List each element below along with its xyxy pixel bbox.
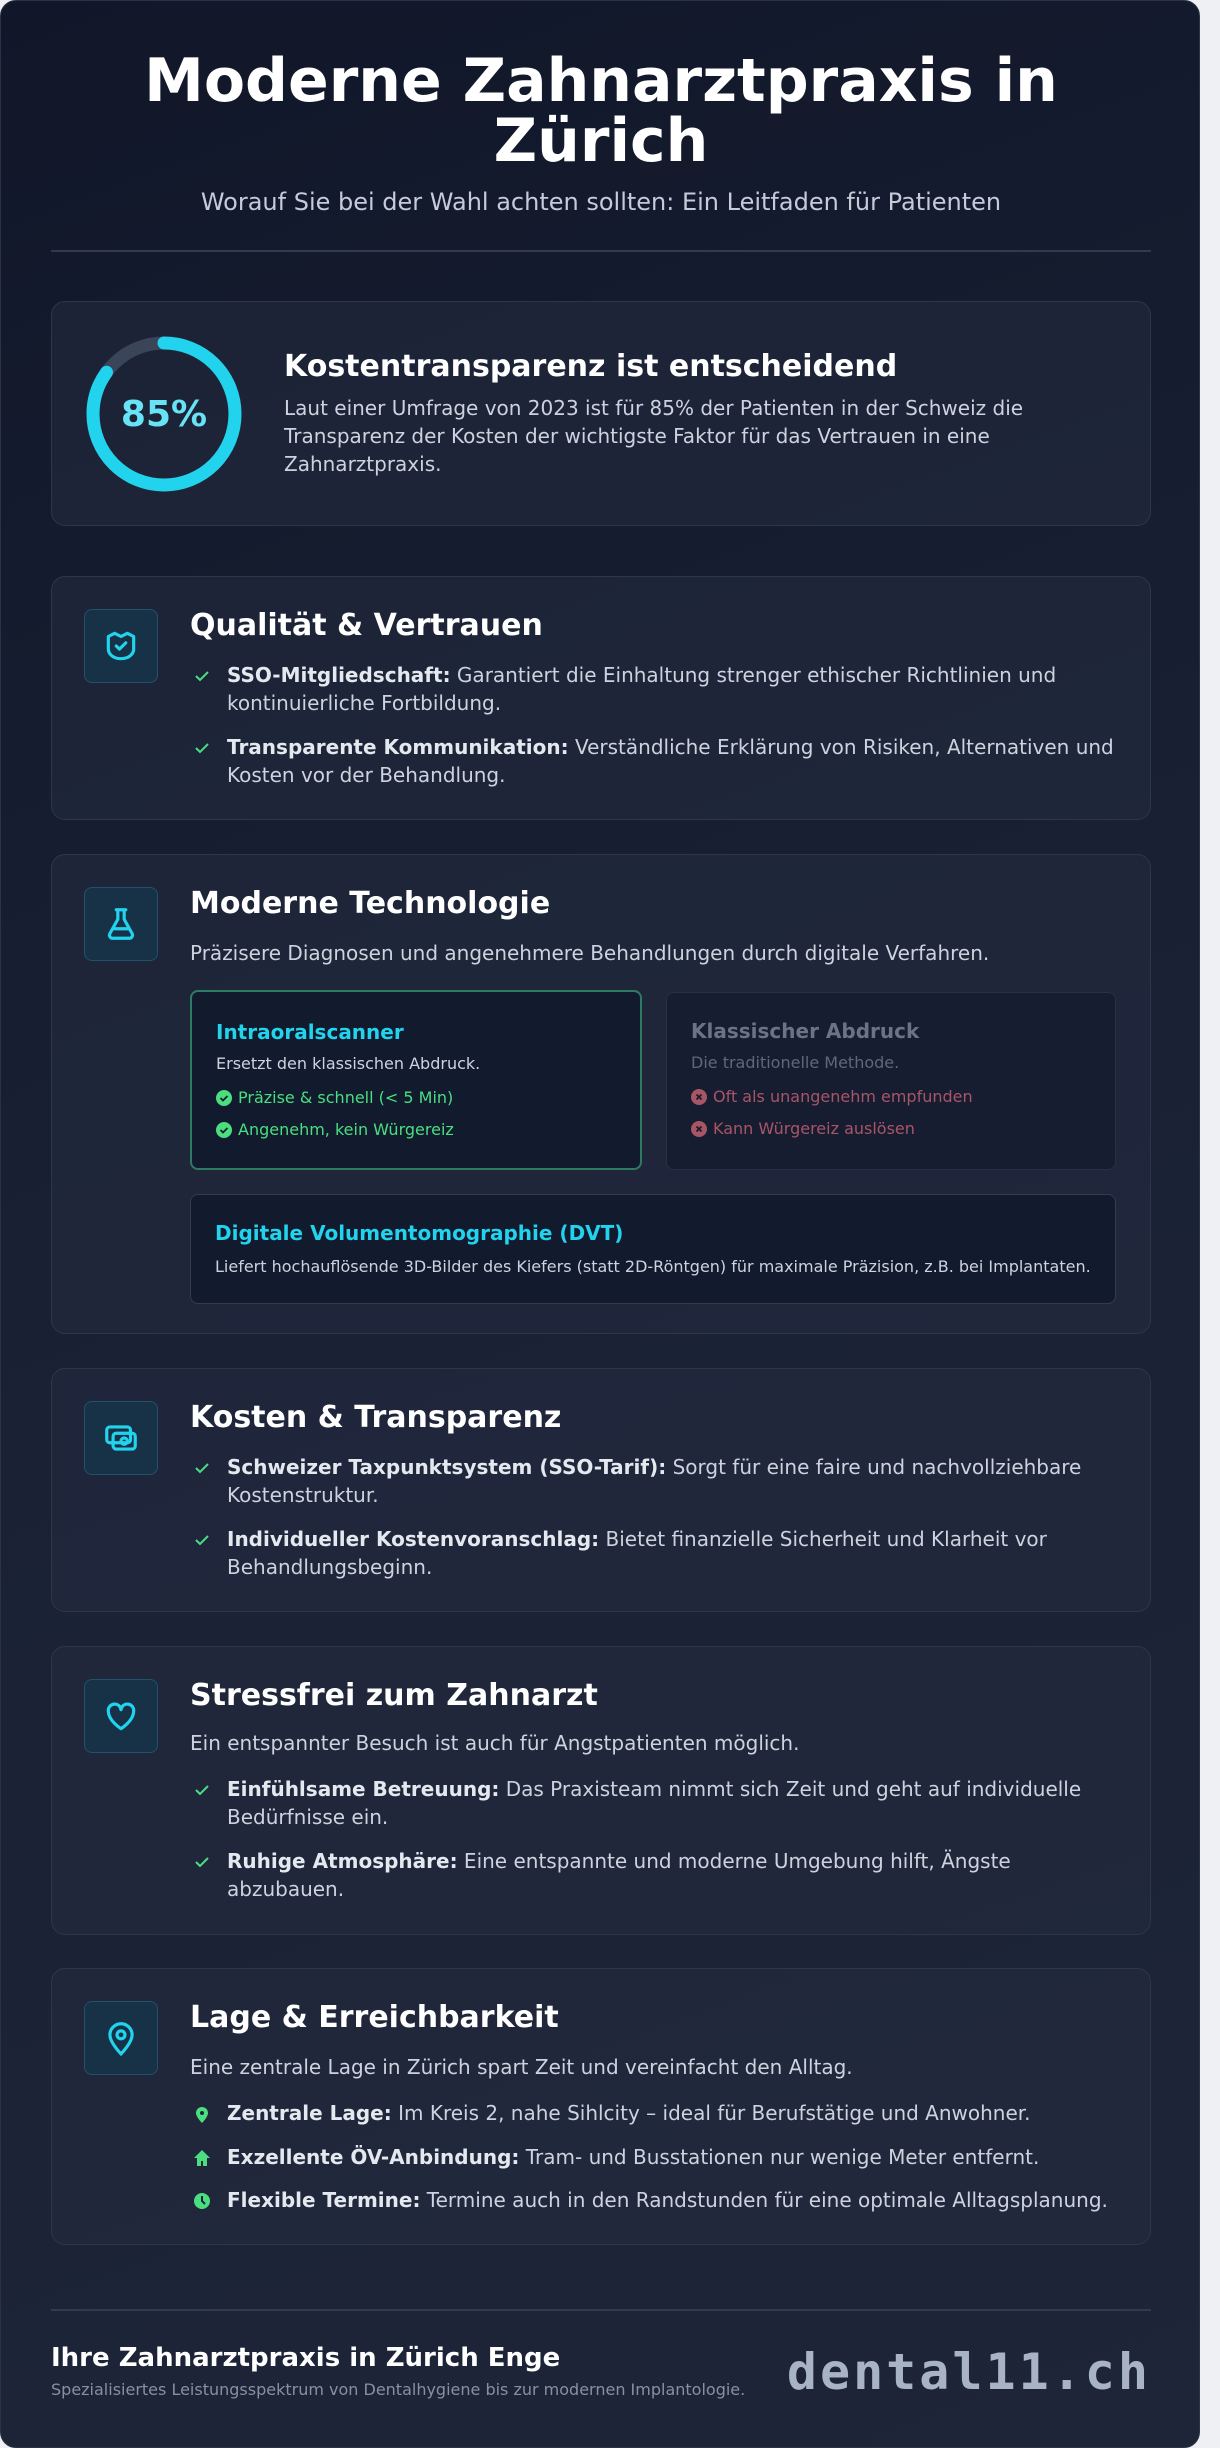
- icon: shield: [84, 609, 158, 683]
- bullet: Einfühlsame Betreuung: Das Praxisteam nimmt sich Zeit und geht auf individuelle Bedürfnisse ein.: [227, 1777, 1081, 1829]
- footer: practice name: Ihre Zahnarztpraxis in Zürich Enge: [51, 2343, 560, 2373]
- card: Intraoralscanner: Ersetzt den klassischen Abdruck.: [216, 1054, 480, 1073]
- body text: Laut einer Umfrage von 2023 ist für 85% der Patienten in der Schweiz die Transparenz der Kosten der wichtigste Faktor für das Vertrauen in eine Zahnarztpraxis.: [284, 396, 1023, 476]
- card: Klassischer Abdruck: Klassischer Abdruck: [691, 1019, 919, 1043]
- bullet: Individueller Kostenvoranschlag: Bietet finanzielle Sicherheit und Klarheit vor Behandlungsbeginn.: [227, 1527, 1047, 1579]
- panel: Lage & Erreichbarkeit: [51, 1968, 1151, 2245]
- heading: Kostentransparenz ist entscheidend: [284, 349, 897, 384]
- title: Moderne Zahnarztpraxis in: [144, 46, 1058, 116]
- chart: donut 85%: [86, 336, 242, 492]
- card: Intraoralscanner: Angenehm, kein Würgereiz: [238, 1120, 454, 1139]
- item: Termine: Flexible Termine: Termine auch in den Randstunden für eine optimale Alltagsplanung.: [227, 2188, 1108, 2212]
- card: Klassischer Abdruck: Oft als unangenehm empfunden: [713, 1087, 973, 1106]
- card: Klassischer Abdruck: Kann Würgereiz auslösen: [713, 1119, 915, 1138]
- panel: Qualität & Vertrauen: [51, 576, 1151, 820]
- panel: stat 85%: [51, 301, 1151, 526]
- card: Klassischer Abdruck: [666, 992, 1116, 1170]
- heading: Qualität & Vertrauen: [190, 608, 543, 643]
- bullet: Transparente Kommunikation: Verständliche Erklärung von Risiken, Alternativen und Kosten vor der Behandlung.: [227, 735, 1114, 787]
- card: Intraoralscanner: Intraoralscanner: [216, 1020, 404, 1044]
- icon: money: [84, 1401, 158, 1475]
- title: [144, 46, 1058, 176]
- item: Zentrale Lage: Zentrale Lage: Im Kreis 2, nahe Sihlcity – ideal für Berufstätige und Anwohner.: [227, 2101, 1031, 2125]
- panel: Kosten & Transparenz: [51, 1368, 1151, 1612]
- heading: Lage & Erreichbarkeit: [190, 2000, 559, 2035]
- card: Intraoralscanner: Präzise & schnell (< 5 Min): [238, 1088, 453, 1107]
- bullet: Ruhige Atmosphäre: Eine entspannte und moderne Umgebung hilft, Ängste abzubauen.: [227, 1849, 1011, 1901]
- card: Klassischer Abdruck: Die traditionelle Methode.: [691, 1053, 899, 1072]
- heading: Moderne Technologie: [190, 886, 550, 921]
- panel: Moderne Technologie: [51, 854, 1151, 1334]
- footer: tagline: Spezialisiertes Leistungsspektrum von Dentalhygiene bis zur modernen Implantologie.: [51, 2380, 745, 2399]
- subtitle: Ein entspannter Besuch ist auch für Angstpatienten möglich.: [190, 1731, 799, 1755]
- bullet: SSO-Mitgliedschaft: Garantiert die Einhaltung strenger ethischer Richtlinien und kontinuierliche Fortbildung.: [227, 663, 1056, 715]
- subtitle: Worauf Sie bei der Wahl achten sollten: Ein Leitfaden für Patienten: [201, 188, 1001, 216]
- heading: Kosten & Transparenz: [190, 1400, 561, 1435]
- icon: heart: [84, 1679, 158, 1753]
- chart: donut 85%: 85%: [121, 394, 207, 435]
- subtitle: Präzisere Diagnosen und angenehmere Behandlungen durch digitale Verfahren.: [190, 941, 989, 965]
- footer: logo text: dental11.ch: [787, 2343, 1151, 2401]
- card: DVT: Liefert hochauflösende 3D-Bilder des Kiefers (statt 2D-Röntgen) für maximale Präzision, z.B. bei Implantaten.: [215, 1257, 1091, 1276]
- item: ÖV: Exzellente ÖV-Anbindung: Tram- und Busstationen nur wenige Meter entfernt.: [227, 2145, 1039, 2169]
- subtitle: Eine zentrale Lage in Zürich spart Zeit und vereinfacht den Alltag.: [190, 2055, 853, 2079]
- icon: location pin: [84, 2001, 158, 2075]
- card: DVT: [190, 1194, 1116, 1304]
- panel: Stressfrei zum Zahnarzt: [51, 1646, 1151, 1935]
- heading: Stressfrei zum Zahnarzt: [190, 1678, 598, 1713]
- title: Zürich: [494, 106, 708, 176]
- card: DVT: Digitale Volumentomographie (DVT): [215, 1221, 623, 1245]
- card: Intraoralscanner: [190, 990, 642, 1170]
- bullet: Schweizer Taxpunktsystem (SSO-Tarif): Sorgt für eine faire und nachvollziehbare Kostenstruktur.: [227, 1455, 1081, 1507]
- icon: flask: [84, 887, 158, 961]
